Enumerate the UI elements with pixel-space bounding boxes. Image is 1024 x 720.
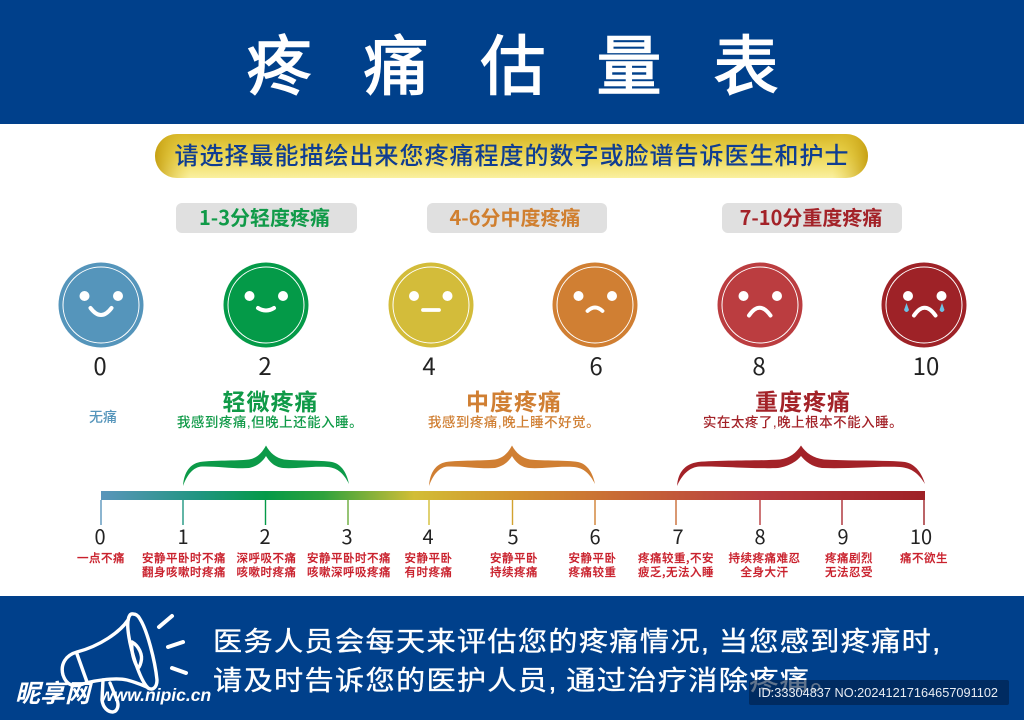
tag: moderate	[427, 202, 607, 233]
scale descriptions: 翻身咳嗽时疼痛	[142, 564, 226, 580]
scale descriptions: 安静平卧时不痛	[142, 550, 226, 566]
text: severe pain: 实在太疼了,晚上根本不能入睡。	[703, 414, 903, 430]
tag: mild	[176, 202, 357, 233]
scale descriptions: 安静平卧	[568, 550, 616, 566]
tag: moderate: 4-6分中度疼痛	[450, 202, 580, 231]
icon: megaphone	[62, 614, 186, 712]
scale descriptions	[77, 550, 948, 580]
title: 疼	[246, 30, 312, 103]
face 6	[552, 262, 638, 348]
footer message: 医务人员会每天来评估您的疼痛情况, 当您感到疼痛时,	[213, 627, 942, 657]
watermark: image id	[749, 680, 1009, 705]
scale descriptions: 疼痛剧烈	[825, 550, 873, 566]
footer band	[0, 596, 1024, 720]
scale numbers: 4	[422, 521, 434, 550]
title: 量	[596, 30, 662, 103]
scale numbers: 0	[94, 521, 106, 550]
tag: severe: 7-10分重度疼痛	[740, 202, 882, 231]
face 2	[224, 262, 308, 348]
scale numbers: 8	[754, 521, 766, 550]
text: moderate pain	[428, 389, 600, 430]
face numbers: 6	[589, 347, 603, 382]
scale descriptions: 持续疼痛难忍	[728, 550, 800, 566]
face numbers: 8	[752, 347, 766, 382]
text: severe pain	[703, 389, 903, 430]
scale descriptions: 咳嗽时疼痛	[236, 564, 296, 580]
pain scale bar	[101, 491, 925, 525]
watermark: image id: ID:33304837 NO:20241217164657091102	[758, 685, 998, 700]
footer message: 请及时告诉您的医护人员, 通过治疗消除疼痛。	[213, 666, 841, 696]
scale descriptions: 持续疼痛	[490, 564, 538, 580]
scale descriptions: 疼痛较重	[568, 564, 616, 580]
face numbers: 10	[913, 347, 939, 382]
header band	[0, 0, 1024, 124]
scale numbers: 10	[910, 521, 932, 550]
text: mild pain: 轻微疼痛	[222, 389, 318, 415]
scale numbers: 7	[672, 521, 684, 550]
face 4	[388, 262, 474, 348]
face numbers	[93, 347, 939, 382]
title	[246, 30, 779, 103]
scale numbers: 6	[589, 521, 601, 550]
scale descriptions: 安静平卧	[490, 550, 538, 566]
text: moderate pain: 我感到疼痛,晚上睡不好觉。	[428, 414, 600, 430]
scale descriptions: 深呼吸不痛	[236, 550, 296, 566]
face numbers: 4	[422, 347, 436, 382]
title: 表	[713, 30, 779, 103]
brace: mild	[183, 446, 349, 486]
brace: moderate	[429, 446, 595, 486]
scale descriptions: 痛不欲生	[900, 550, 948, 566]
face numbers: 2	[258, 347, 272, 382]
instruction pill: 请选择最能描绘出来您疼痛程度的数字或脸谱告诉医生和护士	[174, 136, 850, 171]
text: mild pain: 我感到疼痛,但晚上还能入睡。	[177, 414, 363, 430]
scale numbers	[94, 521, 932, 550]
brace: severe	[677, 446, 925, 486]
face 0	[58, 262, 144, 348]
ticks	[101, 500, 924, 525]
scale numbers: 5	[507, 521, 519, 550]
watermark: site logo	[15, 674, 211, 710]
text: mild pain	[177, 389, 363, 430]
scale numbers: 3	[341, 521, 353, 550]
scale descriptions: 有时疼痛	[404, 564, 452, 580]
scale descriptions: 全身大汗	[740, 564, 788, 580]
watermark: site logo: 昵享网	[15, 674, 94, 710]
scale descriptions: 安静平卧时不痛	[307, 550, 391, 566]
scale descriptions: 无法忍受	[825, 564, 873, 580]
scale descriptions: 疼痛较重,不安	[638, 550, 714, 566]
watermark: site logo: www.nipic.cn	[100, 685, 211, 705]
text: severe pain: 重度疼痛	[755, 389, 851, 415]
face 10	[882, 262, 966, 348]
scale numbers: 2	[259, 521, 271, 550]
scale numbers: 1	[177, 521, 189, 550]
face numbers: 0	[93, 347, 107, 382]
scale numbers: 9	[837, 521, 849, 550]
title: 估	[480, 30, 546, 103]
scale descriptions: 安静平卧	[404, 550, 452, 566]
scale descriptions: 一点不痛	[77, 550, 125, 566]
label: no pain: 无痛	[89, 407, 117, 427]
text: moderate pain: 中度疼痛	[466, 389, 562, 415]
footer message	[213, 627, 942, 696]
tag: mild: 1-3分轻度疼痛	[199, 202, 330, 231]
scale descriptions: 疲乏,无法入睡	[638, 564, 714, 580]
scale descriptions: 咳嗽深呼吸疼痛	[307, 564, 391, 580]
face 8	[718, 262, 802, 348]
title: 痛	[363, 30, 429, 103]
